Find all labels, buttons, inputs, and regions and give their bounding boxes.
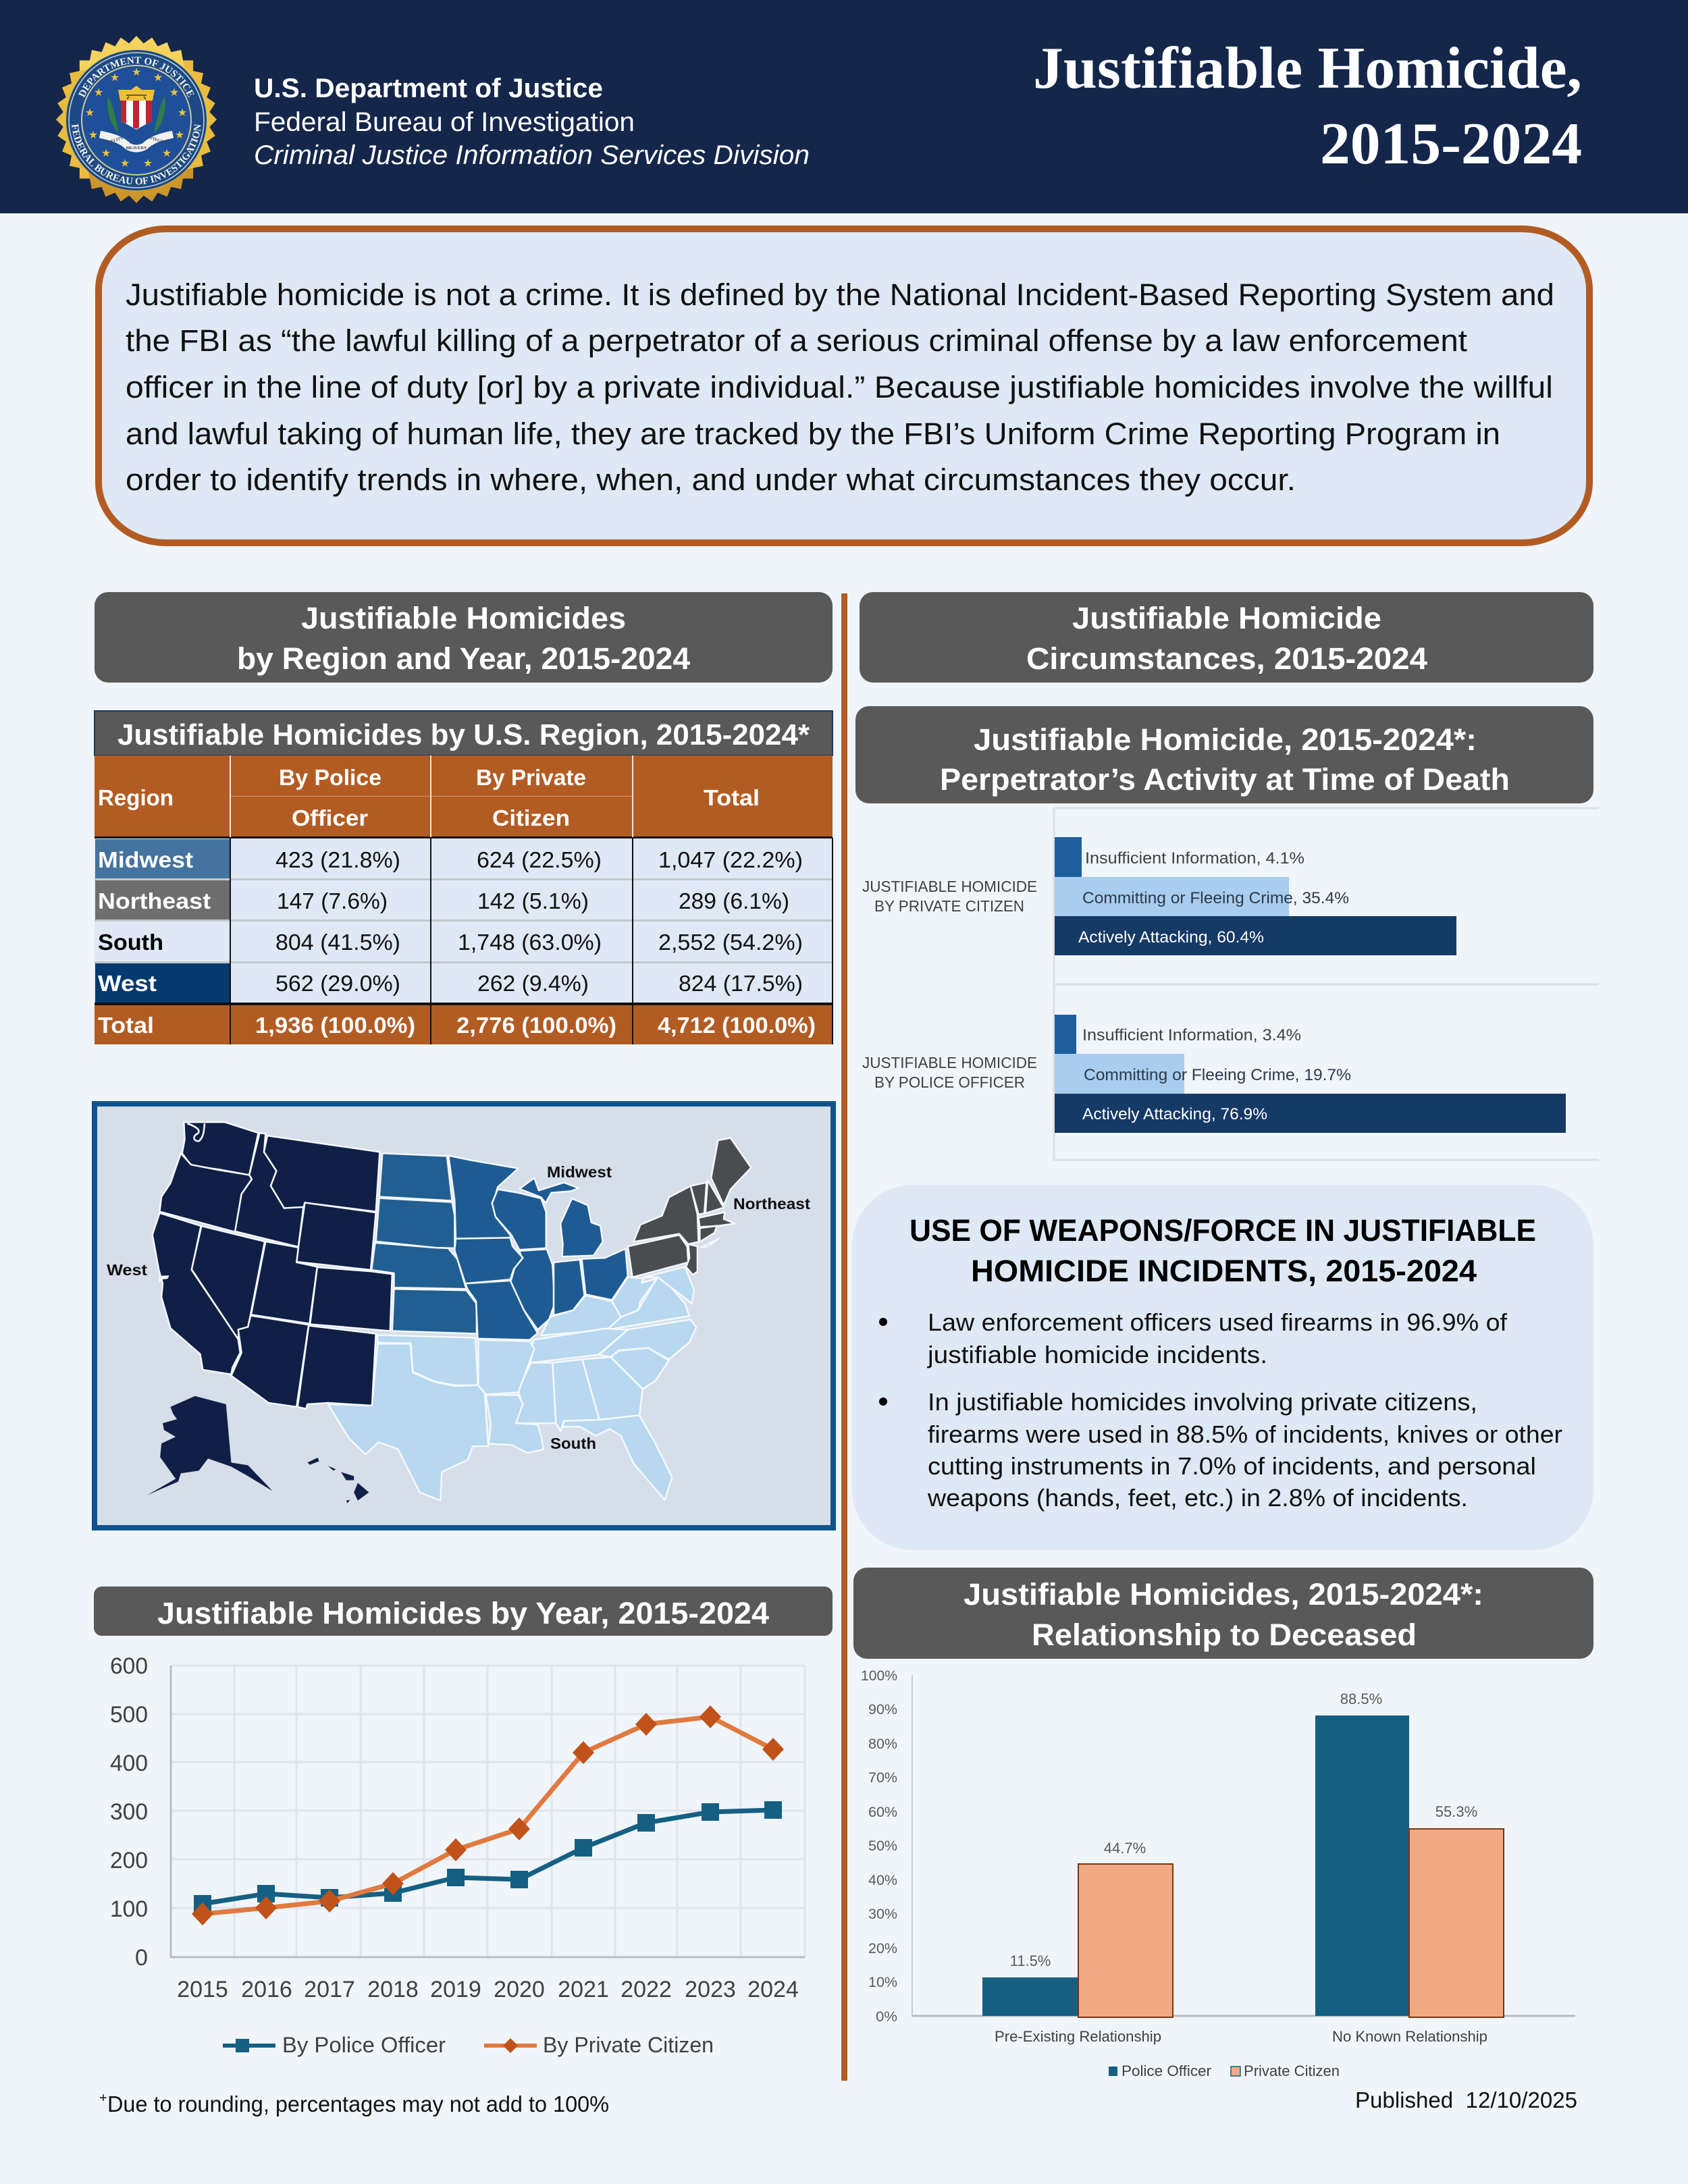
table: homicides by region: By Police xyxy=(279,765,381,790)
group: by private citizen: JUSTIFIABLE HOMICIDE xyxy=(862,878,1037,895)
heading: relationship to deceased: Relationship to Deceased xyxy=(1032,1618,1417,1652)
table: homicides by region: 824 (17.5%) xyxy=(679,971,803,996)
chart legend: By Police Officer xyxy=(282,2033,446,2057)
y axis percent labels: 40% xyxy=(868,1873,897,1888)
table: homicides by region: Officer xyxy=(292,805,368,830)
map region: South xyxy=(328,1267,696,1501)
heading: circumstances: Circumstances, 2015-2024 xyxy=(1026,641,1427,676)
table: homicides by region: Citizen xyxy=(492,805,570,830)
icon: FBI seal: BRAVERY xyxy=(126,146,147,151)
y axis labels: 200 xyxy=(110,1848,148,1873)
callout: definition xyxy=(99,229,1589,543)
chart legend: By Private Citizen xyxy=(543,2033,714,2057)
line chart: homicides by year xyxy=(110,1653,805,2057)
icon: FBI seal: ★ xyxy=(88,130,98,141)
table: homicides by region: 2,552 (54.2%) xyxy=(658,930,803,955)
icon: FBI seal: DEPARTMENT OF JUSTICE xyxy=(78,57,194,98)
panel: use of weapons: In justifiable homicides involving private citizens, xyxy=(928,1388,1477,1416)
icon: FBI seal: ★ xyxy=(162,148,172,159)
series: by private citizen xyxy=(192,1705,784,1925)
panel: use of weapons: HOMICIDE INCIDENTS, 2015-2024 xyxy=(971,1254,1477,1288)
heading: relationship to deceased: Justifiable Homicides, 2015-2024*: xyxy=(964,1577,1483,1612)
heading: perpetrator's activity xyxy=(855,706,1593,803)
y axis percent labels: 70% xyxy=(868,1770,897,1786)
category labels: No Known Relationship xyxy=(1332,2028,1487,2045)
callout: definition: the FBI as “the lawful killing of a perpetrator of a serious criminal offense by a law enforcement xyxy=(126,323,1468,358)
panel: use of weapons: cutting instruments in 7.0% of incidents, and personal xyxy=(928,1452,1536,1480)
table: homicides by region xyxy=(95,711,833,1044)
table: homicides by region: Northeast xyxy=(98,888,211,913)
panel: use of weapons: weapons (hands, feet, etc.) in 2.8% of incidents. xyxy=(927,1484,1468,1512)
icon: FBI seal: ★ xyxy=(94,87,103,99)
group: by police officer: Actively Attacking, 76.9% xyxy=(1082,1105,1267,1123)
group: by private citizen: BY PRIVATE CITIZEN xyxy=(874,897,1024,915)
title: Justifiable Homicide, xyxy=(1033,36,1582,101)
x axis labels: 2016 xyxy=(241,1977,292,2002)
y axis labels: 600 xyxy=(110,1653,148,1679)
y axis percent labels: 50% xyxy=(868,1838,897,1854)
x axis labels: 2022 xyxy=(621,1977,672,2002)
category labels: Pre-Existing Relationship xyxy=(995,2028,1161,2045)
heading: by region and year: by Region and Year, 2015-2024 xyxy=(237,641,690,676)
icon: FBI seal: INTEGRITY xyxy=(147,136,171,147)
group: by police officer: JUSTIFIABLE HOMICIDE xyxy=(862,1054,1037,1071)
table: homicides by region: 4,712 (100.0%) xyxy=(658,1013,816,1038)
y axis labels: 400 xyxy=(110,1751,148,1776)
header text: agency xyxy=(254,74,810,170)
table: homicides by region: Total xyxy=(704,785,760,810)
y axis labels xyxy=(110,1653,148,1971)
callout: definition: and lawful taking of human life, they are tracked by the FBI’s Uniform Crime Reporting Program in xyxy=(126,417,1500,451)
bar chart: perpetrator's activity xyxy=(862,808,1599,1161)
value labels: 55.3% xyxy=(1435,1803,1477,1820)
icon: FBI seal xyxy=(56,36,217,203)
icon: FBI seal: ★ xyxy=(110,72,120,84)
y axis labels: 0 xyxy=(135,1945,148,1971)
callout: definition: officer in the line of duty [or] by a private individual.” Because justifiable homicides involve the willful xyxy=(126,370,1553,404)
y axis percent labels xyxy=(861,1668,897,2025)
table: homicides by region: 1,936 (100.0%) xyxy=(255,1013,415,1038)
map label: South: South xyxy=(550,1435,596,1452)
y axis percent labels: 20% xyxy=(868,1941,897,1956)
footnote: Due to rounding, percentages may not add to 100% xyxy=(107,2092,609,2116)
table: homicides by region: Region xyxy=(98,785,174,810)
heading: perpetrator's activity: Perpetrator’s Activity at Time of Death xyxy=(940,762,1510,797)
header text: agency: U.S. Department of Justice xyxy=(254,74,603,103)
map region: Midwest xyxy=(371,1153,628,1340)
table: homicides by region: 2,776 (100.0%) xyxy=(456,1013,616,1038)
table: homicides by region: 262 (9.4%) xyxy=(477,971,589,996)
header text: agency: Criminal Justice Information Services Division xyxy=(254,140,810,170)
group: by private citizen: Actively Attacking, 60.4% xyxy=(1078,928,1264,947)
heading: circumstances: Justifiable Homicide xyxy=(1072,601,1381,635)
title xyxy=(1033,36,1582,177)
x axis labels: 2015 xyxy=(177,1977,228,2002)
icon: FBI seal: FIDELITY xyxy=(104,136,124,146)
icon: FBI seal: ★ xyxy=(85,107,95,119)
chart legend xyxy=(1109,2062,1340,2079)
group: by police officer: Committing or Fleeing Crime, 19.7% xyxy=(1084,1066,1351,1084)
icon: FBI seal: ★ xyxy=(175,130,184,141)
y axis percent labels: 90% xyxy=(868,1702,897,1717)
group: by private citizen: Insufficient Information, 4.1% xyxy=(1085,849,1304,868)
heading: by year: Justifiable Homicides by Year, 2015-2024 xyxy=(157,1596,769,1630)
icon: FBI seal: FEDERAL BUREAU OF INVESTIGATION xyxy=(72,124,201,185)
table: homicides by region: 289 (6.1%) xyxy=(679,888,789,913)
y axis percent labels: 60% xyxy=(868,1805,897,1820)
map region: Northeast xyxy=(628,1138,751,1277)
table: homicides by region: 423 (21.8%) xyxy=(275,847,400,872)
map label: West: West xyxy=(107,1261,147,1279)
value labels xyxy=(1010,1690,1477,1969)
series: by police officer xyxy=(194,1801,782,1913)
y axis percent labels: 10% xyxy=(868,1975,897,1990)
table: homicides by region: By Private xyxy=(476,765,586,790)
panel: use of weapons: Law enforcement officers used firearms in 96.9% of xyxy=(928,1308,1508,1336)
chart legend xyxy=(223,2033,714,2057)
panel: use of weapons: USE OF WEAPONS/FORCE IN JUSTIFIABLE xyxy=(909,1213,1536,1248)
map region: West xyxy=(147,1122,392,1503)
icon: FBI seal: ★ xyxy=(178,107,187,119)
heading: circumstances xyxy=(860,592,1593,683)
x axis labels: 2024 xyxy=(747,1977,799,2002)
y axis percent labels: 100% xyxy=(861,1668,897,1684)
table: homicides by region: 1,748 (63.0%) xyxy=(458,930,602,955)
table: homicides by region: 1,047 (22.2%) xyxy=(658,847,803,872)
y axis percent labels: 30% xyxy=(868,1907,897,1922)
x axis labels xyxy=(177,1977,799,2002)
table: homicides by region: 147 (7.6%) xyxy=(277,888,388,913)
heading: by year xyxy=(94,1587,833,1636)
callout: definition: Justifiable homicide is not a crime. It is defined by the National Incident-Based Reporting System and xyxy=(126,277,1554,312)
header banner xyxy=(0,0,1688,213)
chart legend: Police Officer xyxy=(1122,2062,1211,2079)
panel: use of weapons: justifiable homicide incidents. xyxy=(927,1341,1267,1368)
heading: by region and year xyxy=(95,592,833,683)
value labels: 44.7% xyxy=(1104,1840,1146,1857)
icon: FBI seal: ★ xyxy=(169,87,179,99)
y axis percent labels: 80% xyxy=(868,1736,897,1752)
icon: FBI seal: ★ xyxy=(101,148,111,159)
panel: US regions map xyxy=(95,1104,833,1528)
bar chart: relationship to deceased xyxy=(861,1668,1575,2079)
icon: FBI seal: ★ xyxy=(120,158,130,169)
x axis labels: 2018 xyxy=(367,1977,419,2002)
heading: relationship to deceased xyxy=(853,1568,1593,1659)
chart legend: Private Citizen xyxy=(1244,2062,1340,2079)
table: homicides by region: Total xyxy=(98,1013,154,1038)
x axis labels: 2020 xyxy=(494,1977,545,2002)
map label: Northeast: Northeast xyxy=(733,1195,810,1213)
group: by police officer: Insufficient Information, 3.4% xyxy=(1082,1026,1301,1044)
table: homicides by region: 624 (22.5%) xyxy=(477,847,602,872)
x axis labels: 2017 xyxy=(304,1977,355,2002)
x axis labels: 2021 xyxy=(558,1977,609,2002)
group: by private citizen: Committing or Fleeing Crime, 35.4% xyxy=(1082,889,1349,907)
panel: use of weapons: firearms were used in 88.5% of incidents, knives or other xyxy=(928,1420,1562,1448)
group: by police officer xyxy=(862,1015,1566,1133)
group: by private citizen xyxy=(862,837,1456,955)
table: homicides by region: 562 (29.0%) xyxy=(275,971,400,996)
table: homicides by region: South xyxy=(98,930,163,955)
value labels: 11.5% xyxy=(1010,1952,1051,1969)
title: 2015-2024 xyxy=(1320,111,1582,177)
bars xyxy=(982,1715,1504,2017)
y axis labels: 300 xyxy=(110,1799,148,1825)
y axis labels: 100 xyxy=(110,1896,148,1922)
table: homicides by region: 142 (5.1%) xyxy=(477,888,589,913)
table: homicides by region: Justifiable Homicides by U.S. Region, 2015-2024* xyxy=(117,718,810,751)
heading: by region and year: Justifiable Homicides xyxy=(301,601,626,635)
map label: Midwest: Midwest xyxy=(547,1163,612,1181)
icon: FBI seal: ★ xyxy=(132,67,141,78)
icon: FBI seal: ★ xyxy=(153,72,163,84)
header text: agency: Federal Bureau of Investigation xyxy=(254,107,635,137)
x axis labels: 2023 xyxy=(685,1977,736,2002)
published date: Published 12/10/2025 xyxy=(1355,2087,1577,2112)
callout: definition: order to identify trends in where, when, and under what circumstances they occur. xyxy=(126,462,1296,497)
x axis labels: 2019 xyxy=(430,1977,481,2002)
group: by police officer: BY POLICE OFFICER xyxy=(874,1073,1025,1091)
y axis labels: 500 xyxy=(110,1702,148,1728)
table: homicides by region: West xyxy=(98,971,157,996)
panel: use of weapons xyxy=(852,1185,1593,1550)
y axis percent labels: 0% xyxy=(876,2009,897,2025)
table: homicides by region: 804 (41.5%) xyxy=(275,930,400,955)
icon: FBI seal: ★ xyxy=(143,158,153,169)
table: homicides by region: Midwest xyxy=(98,847,193,872)
category labels xyxy=(995,2028,1487,2045)
vertical divider xyxy=(841,593,847,2081)
footnote: + xyxy=(99,2091,107,2106)
value labels: 88.5% xyxy=(1340,1690,1382,1707)
heading: perpetrator's activity: Justifiable Homicide, 2015-2024*: xyxy=(974,722,1477,757)
